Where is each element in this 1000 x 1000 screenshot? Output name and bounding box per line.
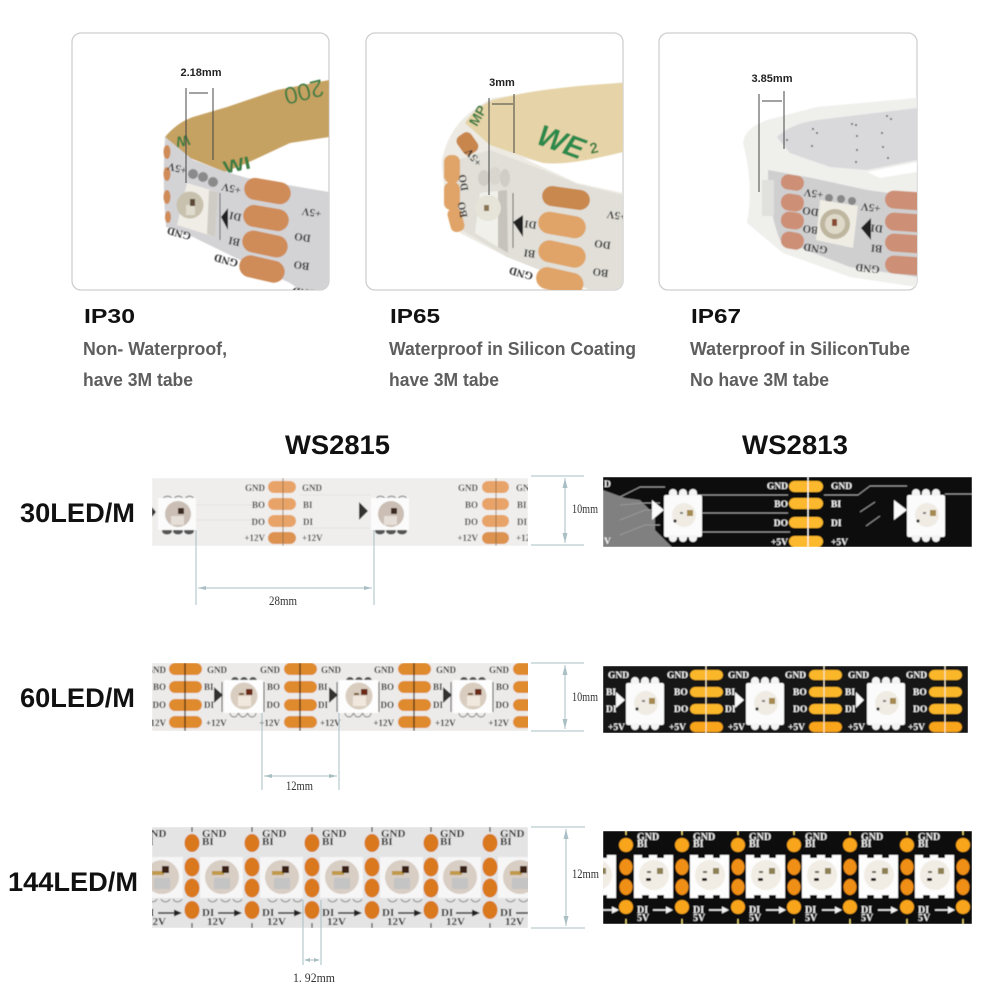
silicone tube [743,98,917,287]
pad labels: GND [637,832,659,843]
pad labels: 12V [147,916,166,928]
dimension: 28mm pitch [196,530,374,608]
dimension: 12mm width, 144LED/M: 12mm [572,866,599,881]
pad labels: GND [767,482,788,492]
pad labels: BI [318,682,328,692]
solder pads [789,481,823,547]
pad labels: BI [606,688,616,698]
pad labels: 12V [267,916,286,928]
pad labels: DI [606,705,617,715]
3.85mm dimension [752,73,793,192]
strip: WS2815 30LED/M [152,478,537,546]
pad labels: 12V [327,916,346,928]
strip silkscreen labels [166,160,322,300]
pad labels: +12V [488,718,509,728]
pad labels: GND [749,832,771,843]
pad labels: GND [906,671,927,681]
strip: WS2813 144LED/M [577,831,972,924]
pad labels: BO [267,682,280,692]
direction arrows [152,502,368,520]
tan 3M backing [165,80,329,172]
pad labels: BI [637,839,648,850]
pad labels: +12V [145,718,166,728]
pad labels: DI [725,705,736,715]
3.85mm dimension: 3.85mm [752,73,793,85]
pad labels: BI [322,836,334,848]
pad labels: DI [805,905,816,916]
pad labels: DI [845,705,856,715]
dimension: 10mm width, 30LED/M: 10mm [572,501,598,516]
strip silkscreen labels: BI [523,246,536,260]
pad labels: GND [374,665,394,675]
strip silkscreen labels: GND [292,284,318,300]
dimension: 10mm width, 30LED/M [531,476,598,545]
IP30 description [83,339,227,390]
pad labels: DI [303,517,313,527]
strip silkscreen labels: DI [870,221,883,235]
green tape print: W [174,131,191,150]
pad labels: GND [260,665,280,675]
3mm dimension: 3mm [489,77,515,89]
pad labels: BI [918,839,929,850]
pad labels [604,480,852,548]
pad labels: BO [465,500,478,510]
pad labels: BO [153,682,166,692]
dimension: 28mm pitch: 28mm [269,593,297,608]
strip silkscreen labels: BO [801,222,819,236]
pad labels: BI [142,836,154,848]
pad labels: BO [252,500,265,510]
icon: direction arrow [513,215,523,237]
pad labels: GND [458,483,478,493]
pad labels: BI [262,836,274,848]
strip silkscreen labels: BO [591,265,609,279]
panel: IP65 product photo [366,33,627,297]
solder pads [444,130,591,297]
pad labels: DI [433,700,443,710]
icon: LEDs [222,677,493,717]
pad labels: +12V [516,533,537,543]
pad labels: DI [500,907,512,919]
pad labels: +12V [435,718,456,728]
pad labels: +5V [788,723,805,733]
pad labels: 12V [446,916,465,928]
pad labels: +12V [302,533,323,543]
strip: WS2813 30LED/M [603,477,972,548]
pad labels: DI [637,905,648,916]
strip silkscreen labels: DO [593,237,612,251]
pad labels: GND [667,671,688,681]
pad labels [606,671,927,733]
pad labels: GND [262,828,286,840]
strip silkscreen labels: +5V [463,145,485,168]
pad labels: BO [381,682,394,692]
pad labels: +5V [608,723,625,733]
strip band [164,137,329,290]
IP30 heading: IP30 [84,306,135,328]
pad labels: 12V [207,916,226,928]
icon: LEDs [140,857,541,902]
pad labels [244,483,537,543]
pad labels: DI [831,519,842,529]
icon: direction arrow [861,218,871,240]
strip silkscreen labels: BO [456,200,470,218]
pad labels: +5V [771,538,788,548]
IP67 description: No have 3M tabe [690,370,829,390]
pad labels: DI [262,907,274,919]
pad labels: DI [441,907,453,919]
pad labels: DO [496,700,509,710]
pad labels: +12V [206,718,227,728]
pad labels: 5V [918,913,931,924]
pad labels: DI [204,700,214,710]
strip silkscreen labels: +5V [606,208,627,222]
pad labels: GND [608,671,629,681]
pad labels: DO [266,700,280,710]
direction arrows [214,687,452,703]
WS2813 column heading: WS2813 [742,430,848,460]
pad labels: DI [861,905,872,916]
IP30 description: Non- Waterproof, [83,339,227,359]
direction arrows [616,692,864,708]
pad labels: DI [322,907,334,919]
row label 60LED/M: 60LED/M [20,683,135,713]
pad labels: BI [381,836,393,848]
strip silkscreen labels: BO [292,258,310,272]
panel: IP67 product photo [659,33,931,290]
back of strip dots [786,115,892,163]
pad labels: +12V [259,718,280,728]
WS2815 column heading: WS2815 [285,430,390,460]
solder pads [268,481,509,544]
IP65 heading: IP65 [390,306,440,328]
strip silkscreen labels: BI [870,241,883,255]
icon: direction arrow [221,208,228,230]
pad labels: GND [245,483,266,493]
pad labels: BI [433,682,443,692]
strip silkscreen labels: +5V [220,180,242,196]
pad labels: GND [322,828,346,840]
pad labels: GND [142,828,166,840]
strip band under coating [450,150,623,290]
icon: LED chip [176,169,218,237]
pad labels: DI [142,907,154,919]
strip band [768,170,917,277]
pad labels: GND [848,671,869,681]
dimension: 12mm width, 144LED/M [531,827,599,928]
icon: LEDs [577,855,954,898]
pad labels: BO [496,682,509,692]
pad labels: 5V [693,913,706,924]
pad labels: +5V [669,723,686,733]
IP65 description [389,339,636,390]
pad labels: GND [728,671,749,681]
IP65 description: have 3M tabe [389,370,499,390]
IP67 description: Waterproof in SiliconTube [690,339,910,359]
solder pads [619,831,970,924]
dimension: 12mm pitch: 12mm [286,778,313,793]
pad labels: DI [318,700,328,710]
pad labels: +5V [848,723,865,733]
pad labels: BI [805,839,816,850]
strip silkscreen labels: GND [803,240,829,256]
pad labels: BI [202,836,214,848]
strip silkscreen labels [456,145,627,282]
strip silkscreen labels: +5V [301,205,322,219]
2.18mm dimension: 2.18mm [181,67,222,79]
icon: LEDs [626,677,905,730]
icon: LED chip [816,194,858,248]
pad labels: +5V [728,723,745,733]
pad labels: GND [321,665,342,675]
dimension: 1.92mm pad [293,900,335,985]
pad labels [145,665,510,728]
pad labels: GND [918,832,940,843]
pad labels: 5V [637,913,650,924]
pad labels: DO [252,517,265,527]
pad labels: +12V [320,718,341,728]
pad labels: BO [774,500,788,510]
pad labels [637,832,940,924]
pad labels: DI [693,905,704,916]
strip silkscreen labels: +5V [860,200,881,214]
pad labels: +12V [373,718,394,728]
pad labels: GND [500,828,524,840]
pad labels: DO [152,700,166,710]
IP67 description [690,339,910,390]
pad labels: GND [302,483,322,493]
pad labels: +12V [457,533,478,543]
pad labels: BO [913,688,927,698]
pad labels: GND [805,832,827,843]
pad labels [142,828,524,928]
grey worn area [603,490,672,547]
pad labels: BI [845,688,855,698]
green tape print: MP [465,102,490,129]
icon: LED 2 [907,489,945,542]
pad labels: DI [382,907,394,919]
strip silkscreen labels: +5V [166,160,188,176]
inner tube surface [777,108,917,170]
row label 30LED/M: 30LED/M [20,498,135,528]
dimension: 10mm width, 60LED/M [531,663,598,731]
pad labels: D [604,480,611,490]
pad labels: +12V [244,533,265,543]
direction arrows [652,500,907,520]
pad labels: 12V [505,916,524,928]
pad labels: BI [831,500,841,510]
pad labels: DI [918,905,929,916]
solder pads [690,670,962,732]
strip: WS2813 60LED/M [603,666,968,733]
pad labels: +5V [908,723,925,733]
icon: LED 1 [158,496,196,534]
green tape print: WE [530,120,593,165]
pad labels: GND [831,482,852,492]
pad labels: GND [202,828,226,840]
icon: LED 1 [664,489,702,542]
3mm dimension [489,77,515,195]
icon: LED 2 [371,496,409,534]
dimension: 10mm width, 60LED/M: 10mm [572,689,598,704]
pad labels: DO [793,705,807,715]
pad labels: DI [202,907,214,919]
pad labels: BI [303,500,313,510]
pad labels: V [604,537,611,547]
flow arrows [158,910,528,916]
strip silkscreen labels: DI [228,209,243,223]
pad labels: DO [674,705,688,715]
flow arrows [603,906,955,914]
pad labels: BO [793,688,807,698]
pad labels: BI [861,839,872,850]
pad labels: +5V [831,538,848,548]
pad labels: BI [693,839,704,850]
pad labels: 5V [861,913,874,924]
pad labels: GND [861,832,883,843]
pad labels: GND [381,828,406,840]
icon: LED chip [475,167,510,253]
pad labels: GND [516,483,536,493]
strip silkscreen labels: GND [508,264,535,282]
pad labels: BI [440,836,452,848]
solder pads [169,663,546,728]
strip silkscreen labels: DO [801,204,820,218]
panel: IP30 product photo [72,33,329,300]
strip silkscreen labels: GND [213,251,240,269]
solder pads [164,145,293,285]
pad labels: DI [749,905,760,916]
solder pads [184,827,498,928]
strip silkscreen labels: +5V [803,186,824,200]
pad labels: BI [517,500,527,510]
strip silkscreen labels [801,186,883,275]
strip: WS2815 60LED/M [145,663,546,731]
pad labels: DO [913,705,927,715]
green tape print: 2 [588,139,600,158]
silicone coated band [442,82,623,254]
pad labels: GND [436,665,456,675]
strip silkscreen labels: DI [524,217,537,231]
pad labels: BO [674,688,688,698]
pad labels: BI [749,839,760,850]
green tape print [176,78,324,174]
row label 144LED/M: 144LED/M [8,867,138,897]
strip silkscreen labels: GND [166,224,193,242]
pad labels: GND [440,828,464,840]
pad labels: 5V [805,913,818,924]
pad labels: GND [207,665,228,675]
pad labels: GND [693,832,715,843]
strip silkscreen labels: DO [457,173,471,192]
strip silkscreen labels: BI [227,234,241,248]
pad labels: BI [204,682,214,692]
IP65 description: Waterproof in Silicon Coating [389,339,636,359]
pad labels: GND [785,671,806,681]
dimension: 12mm pitch [262,713,339,793]
pad labels: BI [500,836,512,848]
strip silkscreen labels: DO [293,230,312,244]
green tape print: WI [221,153,252,178]
pad labels: 5V [749,913,762,924]
IP67 heading: IP67 [691,306,741,328]
tan 3M backing [465,83,623,163]
dimension: 1.92mm pad: 1. 92mm [293,970,335,985]
solder pads [780,174,931,276]
strip silkscreen labels: GND [855,261,880,275]
pad labels: GND [146,665,166,675]
pad labels: BI [725,688,735,698]
strip: WS2815 144LED/M [140,827,541,928]
pad labels: DO [774,519,788,529]
embedded end chip [762,180,774,216]
pad labels: DI [517,517,527,527]
green tape print: 200 [281,73,327,109]
pad labels: DO [380,700,394,710]
2.18mm dimension [181,67,222,183]
green tape print [468,105,599,160]
IP30 description: have 3M tabe [83,370,193,390]
pad labels: 12V [387,916,406,928]
pad labels: GND [489,665,510,675]
pad labels: DO [464,517,478,527]
